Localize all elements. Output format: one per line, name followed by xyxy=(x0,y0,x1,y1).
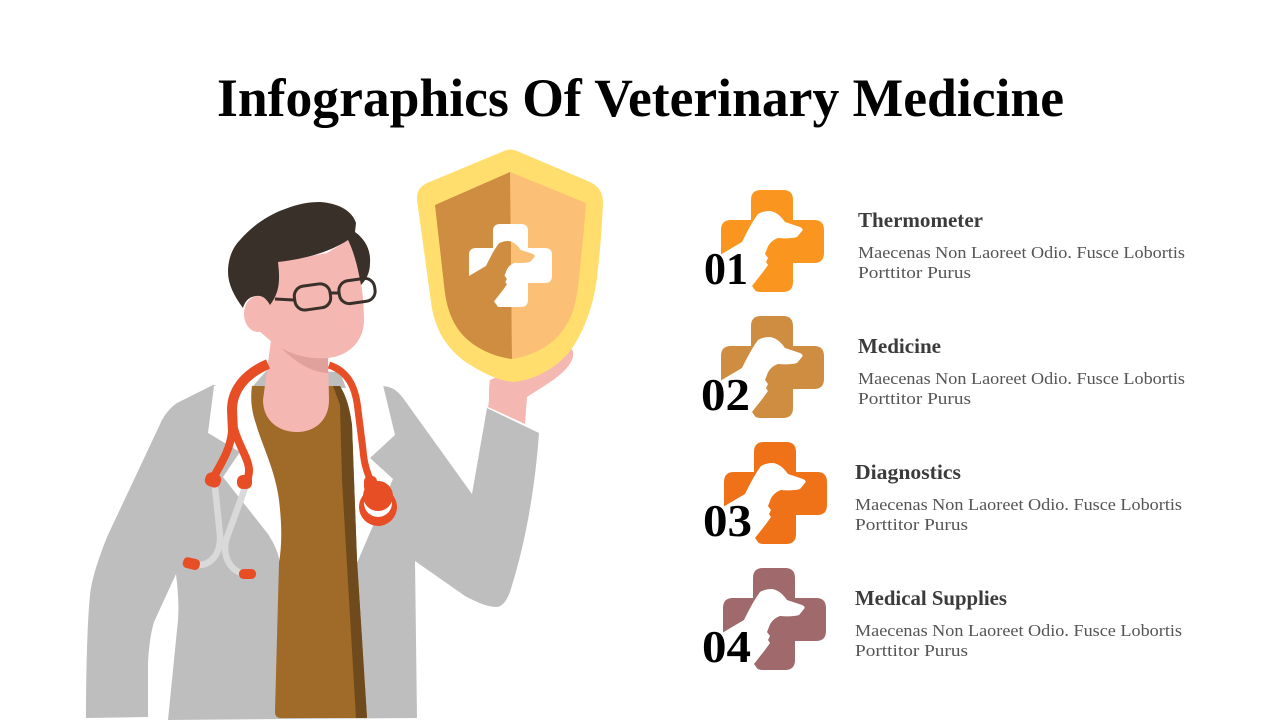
description 4: Porttitor Purus xyxy=(855,641,968,660)
white cross xyxy=(469,224,552,307)
collar shadow xyxy=(253,370,346,388)
heading 4: Medical Supplies xyxy=(855,586,1007,610)
stethoscope binaurals xyxy=(196,487,246,574)
number 04: 04 xyxy=(702,621,751,672)
dog silhouette left xyxy=(469,241,511,307)
description 4: Maecenas Non Laoreet Odio. Fusce Lobortis xyxy=(855,621,1182,640)
cross icon 4 xyxy=(722,568,826,671)
description 2: Porttitor Purus xyxy=(858,389,971,408)
hair xyxy=(228,202,370,308)
stethoscope xyxy=(182,364,397,579)
neck shadow xyxy=(277,344,328,373)
item 3: Diagnostics xyxy=(703,442,1182,546)
heading 3: Diagnostics xyxy=(855,460,961,484)
ear tips xyxy=(182,556,201,571)
shield right half xyxy=(510,172,586,359)
coat lining and lapels xyxy=(208,368,395,563)
shirt stripe xyxy=(333,386,367,718)
tube ends xyxy=(203,471,377,492)
description 1 xyxy=(858,243,1185,282)
glasses xyxy=(275,277,376,311)
title: Infographics Of Veterinary Medicine xyxy=(217,68,1064,128)
item 2: Medicine xyxy=(701,316,1185,420)
item 4: Medical Supplies xyxy=(702,568,1182,672)
shield icon xyxy=(417,150,603,382)
description 1: Porttitor Purus xyxy=(858,263,971,282)
neck xyxy=(263,340,329,432)
illustration: veterinarian xyxy=(86,202,573,720)
description 3: Maecenas Non Laoreet Odio. Fusce Lobortis xyxy=(855,495,1182,514)
description 1: Maecenas Non Laoreet Odio. Fusce Lobortis xyxy=(858,243,1185,262)
red tubing xyxy=(212,364,373,486)
ear xyxy=(244,296,272,332)
cross icon 3 xyxy=(723,442,827,545)
description 3: Porttitor Purus xyxy=(855,515,968,534)
dog silhouette right xyxy=(511,242,535,265)
shield rim xyxy=(417,150,603,382)
number 03: 03 xyxy=(703,495,752,546)
number 01: 01 xyxy=(704,243,748,294)
description 3 xyxy=(855,495,1182,534)
shirt xyxy=(251,386,367,718)
heading 1: Thermometer xyxy=(858,208,983,232)
lab coat xyxy=(86,385,539,720)
heading 2: Medicine xyxy=(858,334,941,358)
chest piece xyxy=(359,481,397,526)
cross icon 2 xyxy=(720,316,824,419)
description 4 xyxy=(855,621,1182,660)
face xyxy=(258,240,364,358)
cross icon 1 xyxy=(720,190,824,293)
hand xyxy=(488,346,573,424)
description 2: Maecenas Non Laoreet Odio. Fusce Lobortis xyxy=(858,369,1185,388)
shield left half xyxy=(435,172,512,359)
description 2 xyxy=(858,369,1185,408)
number 02: 02 xyxy=(701,369,750,420)
item 1: Thermometer xyxy=(704,190,1185,294)
